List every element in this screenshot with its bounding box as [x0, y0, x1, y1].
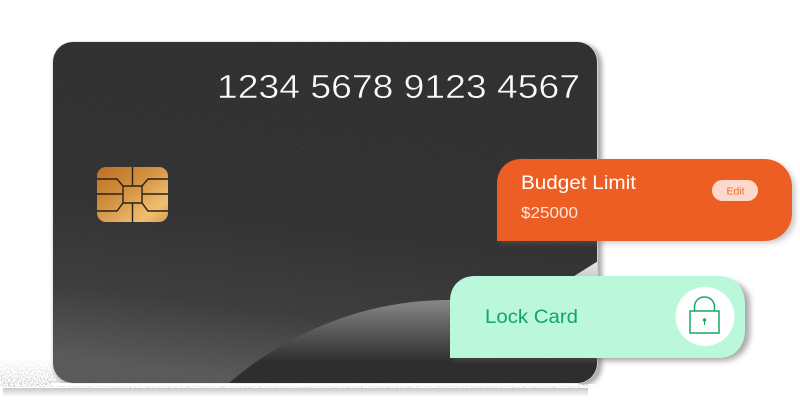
- edit button: [712, 180, 758, 201]
- card body: [53, 42, 597, 383]
- edit button: Edit: [726, 186, 745, 198]
- card shadow: [0, 42, 602, 397]
- lock heading: Lock Card: [485, 306, 578, 328]
- icon: padlock: [676, 287, 734, 346]
- budget heading: Budget Limit: [521, 172, 637, 194]
- budget panel shadow: [500, 162, 795, 243]
- card grain: [53, 42, 597, 383]
- chip icon: [97, 167, 168, 222]
- lock panel background: [450, 276, 745, 358]
- panel: lock card: [450, 276, 750, 361]
- budget amount: $25000: [521, 205, 578, 222]
- budget panel background: [497, 159, 792, 241]
- card number: 1234 5678 9123 4567: [217, 69, 580, 106]
- credit card: [53, 42, 600, 383]
- card hill graphic: [229, 260, 600, 383]
- panel: budget limit: [497, 159, 795, 243]
- lock panel shadow: [453, 281, 750, 361]
